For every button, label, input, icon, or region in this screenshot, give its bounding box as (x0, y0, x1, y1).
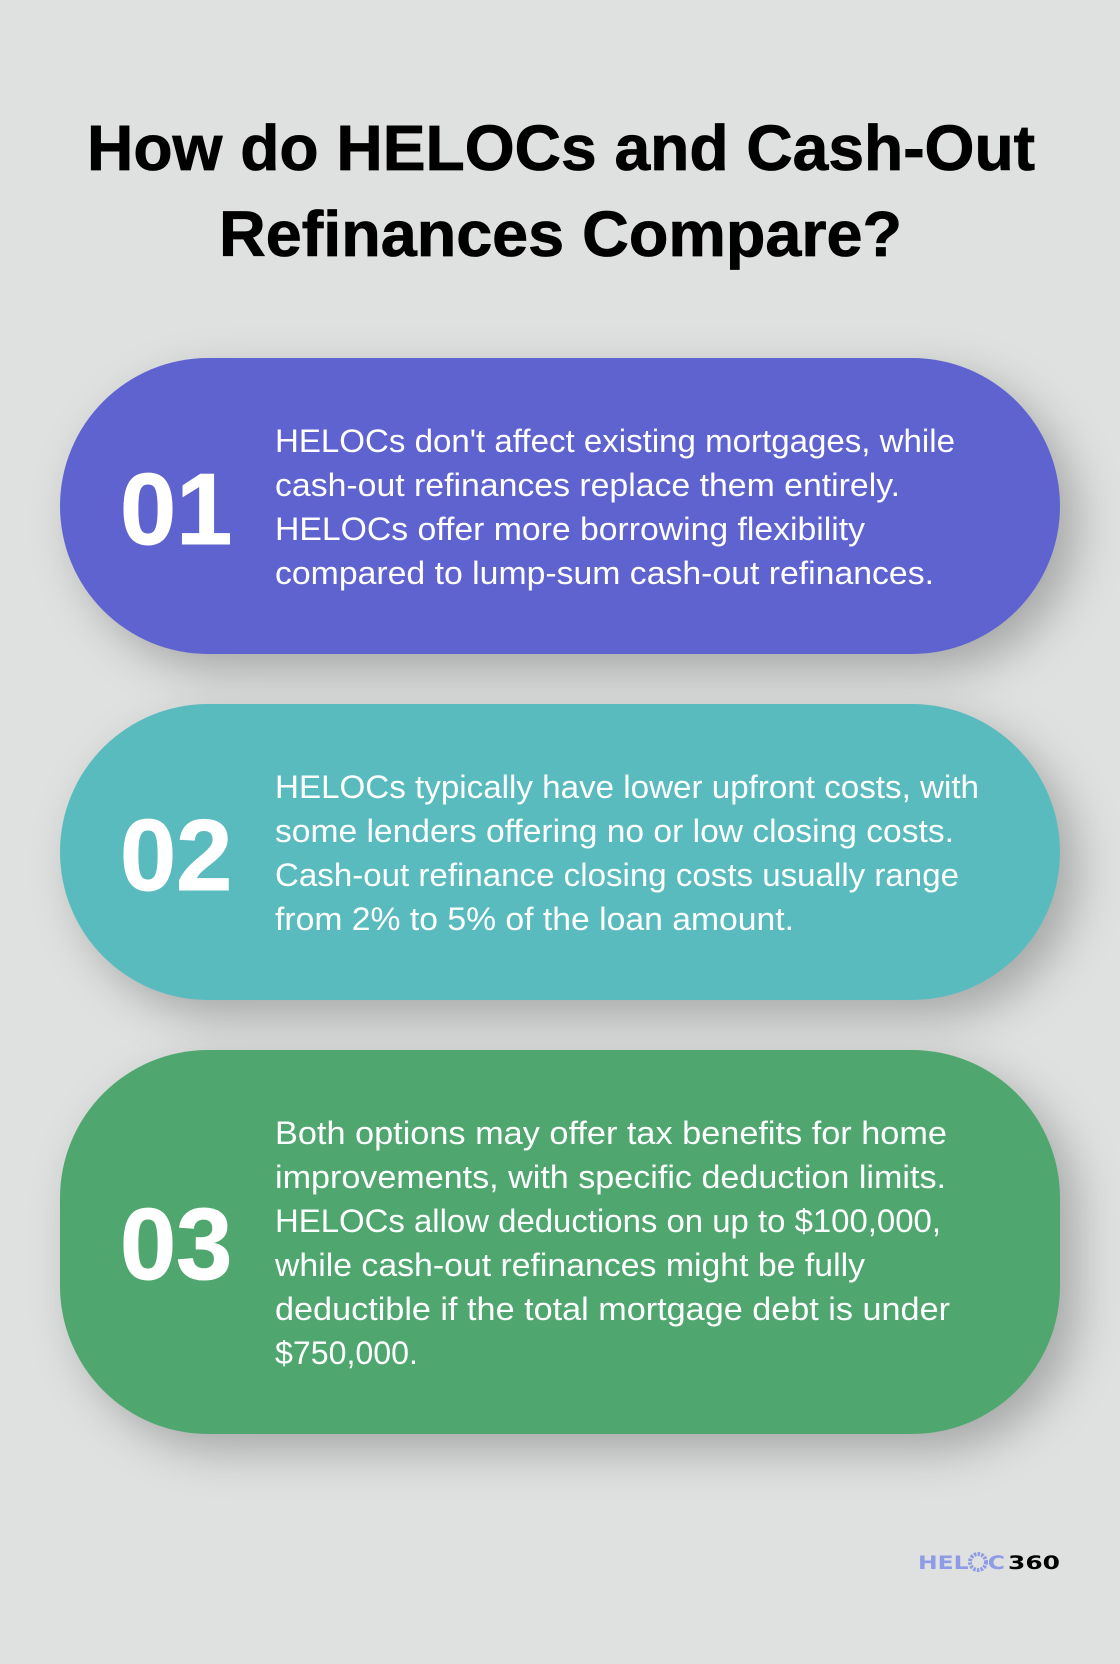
text block 03: Both options may offer tax benefits for home (275, 1115, 947, 1151)
text block 03: HELOCs allow deductions on up to $100,000, (275, 1203, 941, 1239)
text block 03: improvements, with specific deduction limits. (275, 1159, 946, 1195)
text block 01: cash-out refinances replace them entirely. (275, 467, 900, 503)
text block 03 (274, 1115, 950, 1371)
text block 03: $750,000. (275, 1335, 418, 1371)
text block 02: Cash-out refinance closing costs usually range (275, 857, 959, 893)
title: Refinances Compare? (219, 198, 902, 270)
title: How do HELOCs and Cash-Out (87, 112, 1035, 184)
number 01: 01 (120, 454, 232, 566)
text block 03: deductible if the total mortgage debt is under (275, 1291, 950, 1327)
number 02: 02 (120, 800, 232, 912)
text block 01 (275, 423, 955, 591)
logo: HELOC360 (918, 1552, 1060, 1574)
panel: 01 mortgages and flexibility (60, 358, 1060, 654)
text block 01: compared to lump-sum cash-out refinances. (275, 555, 934, 591)
panel: 02 closing costs (60, 704, 1060, 1000)
text block 01: HELOCs offer more borrowing flexibility (275, 511, 866, 547)
text block 03: while cash-out refinances might be fully (274, 1247, 866, 1283)
number 03: 03 (120, 1189, 232, 1301)
title (87, 112, 1035, 270)
logo: HELOC360: HEL OC (918, 1552, 1005, 1574)
logo: HELOC360: 360 (1008, 1552, 1060, 1574)
text block 02: some lenders offering no or low closing costs. (275, 813, 954, 849)
text block 02: from 2% to 5% of the loan amount. (275, 901, 794, 937)
panel: 03 tax benefits (60, 1050, 1060, 1434)
text block 01: HELOCs don't affect existing mortgages, while (275, 423, 955, 459)
text block 02 (275, 769, 979, 937)
text block 02: HELOCs typically have lower upfront costs, with (275, 769, 979, 805)
